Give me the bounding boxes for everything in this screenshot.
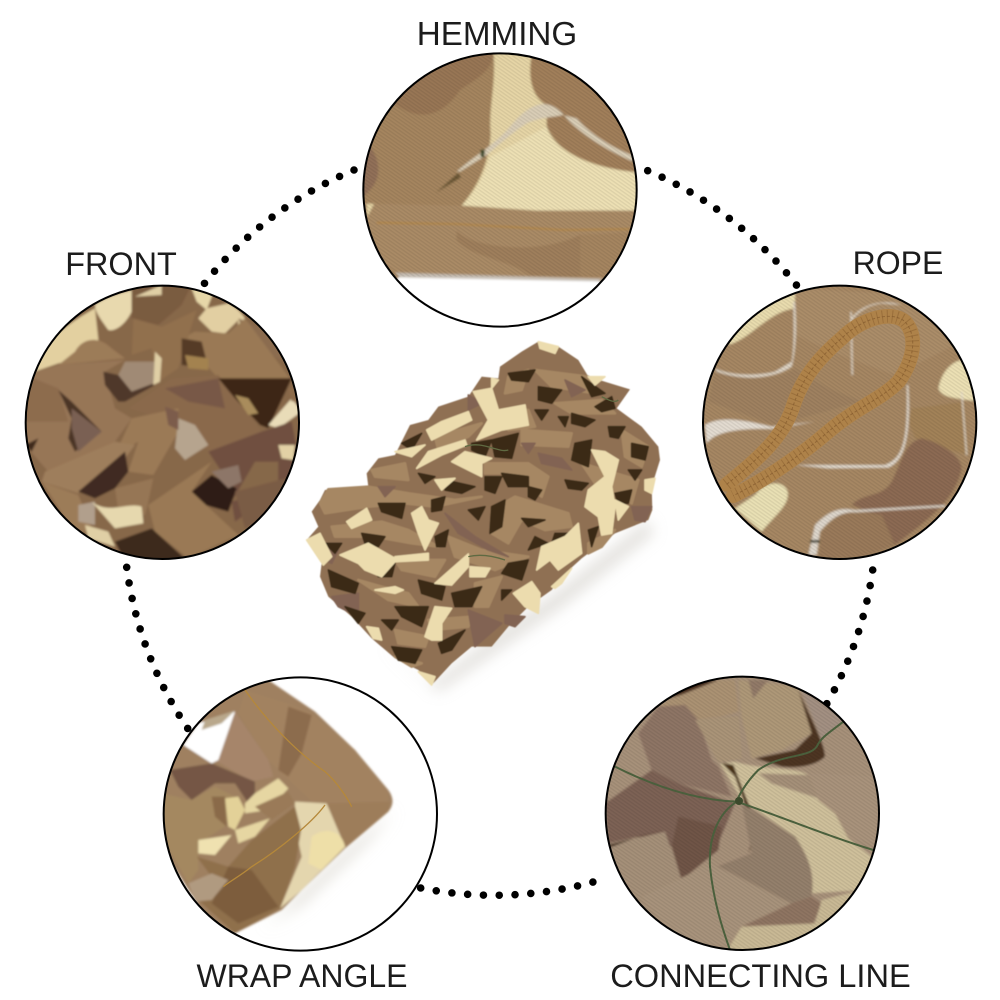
brown ribbons xyxy=(320,370,648,667)
detail circle: hemming xyxy=(362,52,638,328)
heading: front: FRONT xyxy=(65,246,177,282)
dotted ring connecting the detail circles xyxy=(127,170,873,895)
detail circle: wrap angle xyxy=(162,676,438,952)
net body with jagged leaf edge xyxy=(307,342,660,685)
green cords xyxy=(465,397,618,560)
heading: connecting line: CONNECTING LINE xyxy=(610,957,911,994)
mauve patches xyxy=(315,380,652,647)
dark gaps xyxy=(325,370,648,663)
detail circle: front xyxy=(24,284,300,560)
central product: folded camouflage net xyxy=(307,342,660,692)
detail circle: rope xyxy=(702,284,978,560)
cream patches xyxy=(307,342,655,685)
heading: wrap angle: WRAP ANGLE xyxy=(196,958,408,994)
heading: hemming: HEMMING xyxy=(417,16,577,53)
ground shadow xyxy=(378,520,653,692)
heading: rope: ROPE xyxy=(853,245,943,281)
detail circle: connecting line xyxy=(604,676,880,951)
